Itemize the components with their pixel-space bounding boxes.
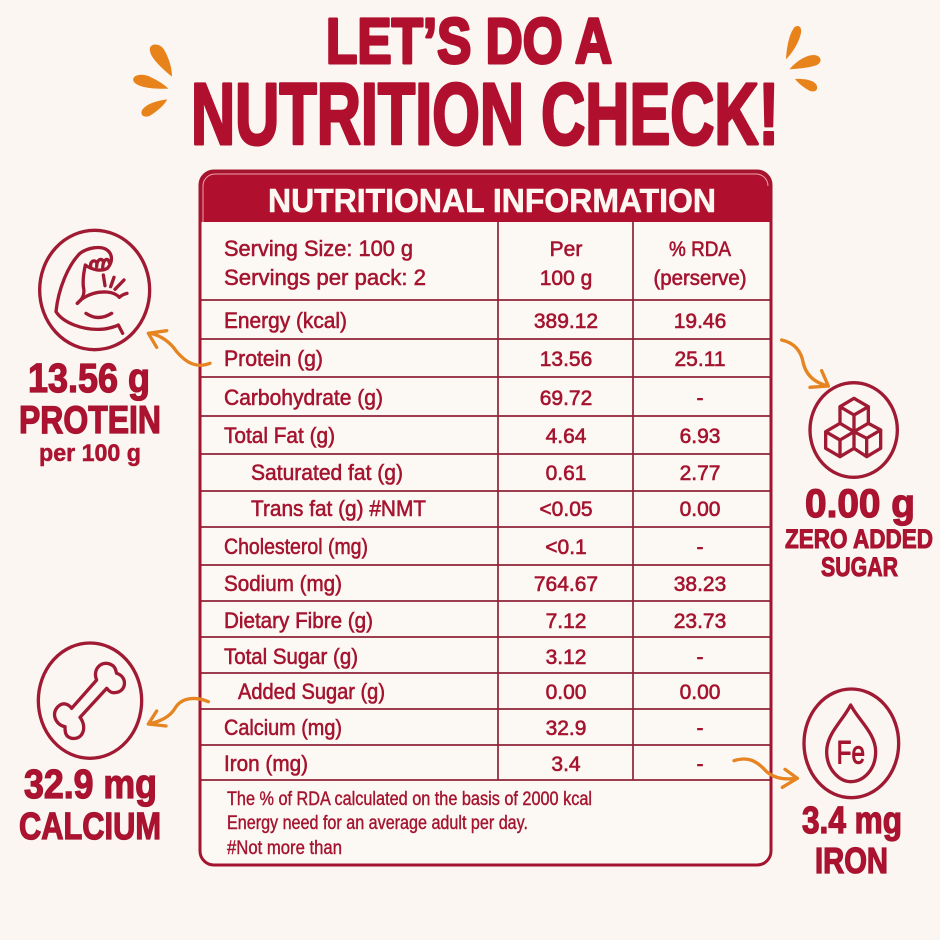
row: sodium: [224, 571, 726, 596]
arrow: calcium row to bone icon: [148, 698, 208, 726]
table header band: [200, 171, 771, 222]
row: cholesterol: -: [696, 536, 704, 559]
icon: bone: [38, 643, 142, 758]
footnote: #Not more than: [227, 838, 342, 859]
row: total fat: 4.64: [546, 425, 587, 448]
serving information row: [224, 236, 746, 290]
row: dietary fibre: Dietary Fibre (g): [224, 608, 373, 633]
row: saturated fat: 0.61: [546, 462, 586, 485]
row: carbohydrate: [224, 385, 704, 410]
row: added sugar: [238, 679, 720, 704]
row: iron: Iron (mg): [224, 751, 308, 776]
row: iron: 3.4: [551, 753, 581, 776]
row: iron: [224, 751, 704, 776]
row: cholesterol: <0.1: [545, 536, 587, 559]
row: energy: 19.46: [674, 310, 726, 333]
serving information row: 100 g: [540, 267, 592, 290]
callout: calcium: 32.9 mg: [24, 761, 157, 807]
row: calcium: Calcium (mg): [224, 715, 342, 740]
row: added sugar: 0.00: [680, 681, 720, 704]
row: trans fat: 0.00: [680, 498, 720, 521]
panel: nutrition table: [200, 171, 771, 865]
row: trans fat: <0.05: [539, 498, 593, 521]
row: carbohydrate: Carbohydrate (g): [224, 385, 383, 410]
row: sodium: Sodium (mg): [224, 571, 342, 596]
callout: protein: PROTEIN: [19, 399, 161, 442]
row: saturated fat: 2.77: [680, 462, 720, 485]
row: sodium: 38.23: [674, 573, 726, 596]
row: protein: Protein (g): [224, 346, 323, 371]
serving information row: (perserve): [654, 267, 746, 290]
serving information row: Per: [550, 238, 582, 261]
arrow: to sugar icon: [782, 340, 828, 387]
row: iron: -: [696, 753, 704, 776]
icon: iron drop: [804, 689, 899, 798]
row: carbohydrate: 69.72: [540, 387, 592, 410]
row: protein: 13.56: [540, 348, 592, 371]
row: added sugar: Added Sugar (g): [238, 679, 385, 704]
row: calcium: 32.9: [546, 717, 586, 740]
row: trans fat: Trans fat (g) #NMT: [251, 496, 426, 521]
row: saturated fat: [251, 460, 720, 485]
callout: protein: [19, 355, 161, 467]
callout: iron: 3.4 mg: [802, 800, 902, 842]
row: total sugar: Total Sugar (g): [224, 644, 358, 669]
title: LET’S DO A: [326, 5, 612, 77]
row: saturated fat: Saturated fat (g): [251, 460, 403, 485]
row: total fat: Total Fat (g): [224, 423, 335, 448]
row: energy: Energy (kcal): [224, 308, 347, 333]
footnote: [227, 789, 592, 859]
footnote: Energy need for an average adult per day.: [227, 813, 528, 834]
row: carbohydrate: -: [696, 387, 704, 410]
icon: iron drop: Fe: [837, 734, 865, 770]
row: protein: 25.11: [674, 348, 726, 371]
row: total fat: 6.93: [680, 425, 720, 448]
row: total sugar: [224, 644, 704, 669]
title: [191, 5, 779, 163]
row: cholesterol: [224, 534, 704, 559]
icon: sugar cubes: [810, 383, 897, 477]
arrow: protein row to protein icon: [148, 331, 210, 365]
row: dietary fibre: 7.12: [546, 610, 586, 633]
row: dietary fibre: [224, 608, 726, 633]
row: total sugar: -: [696, 646, 704, 669]
row: added sugar: 0.00: [546, 681, 586, 704]
row: calcium: -: [696, 717, 704, 740]
callout: protein: per 100 g: [39, 440, 141, 467]
row: calcium: [224, 715, 704, 740]
arrow: iron row to drop icon: [734, 759, 797, 787]
icon: right orange splash: [786, 26, 821, 91]
serving information row: Serving Size: 100 g: [224, 236, 413, 261]
callout: calcium: [19, 761, 161, 848]
callout: iron: IRON: [815, 840, 888, 881]
row: dietary fibre: 23.73: [674, 610, 726, 633]
row: energy: 389.12: [534, 310, 598, 333]
callout: calcium: CALCIUM: [19, 806, 161, 848]
row: energy: [224, 308, 726, 333]
serving information row: Servings per pack: 2: [224, 265, 426, 290]
footnote: The % of RDA calculated on the basis of 2000 kcal: [227, 789, 592, 810]
row: total fat: [224, 423, 720, 448]
row: sodium: 764.67: [534, 573, 598, 596]
callout: zero added sugar: 0.00 g: [805, 482, 915, 526]
callout: zero added sugar: SUGAR: [821, 552, 898, 582]
serving information row: % RDA: [669, 238, 731, 261]
row: cholesterol: Cholesterol (mg): [224, 534, 368, 559]
row: protein: [224, 346, 726, 371]
icon: flexed arm: [40, 230, 150, 350]
callout: iron: [802, 800, 902, 881]
table header band: NUTRITIONAL INFORMATION: [268, 182, 716, 219]
icon: left orange splash: [133, 44, 172, 117]
row: total sugar: 3.12: [546, 646, 586, 669]
row: trans fat: [251, 496, 720, 521]
callout: zero added sugar: [785, 482, 933, 582]
callout: protein: 13.56 g: [28, 355, 150, 401]
